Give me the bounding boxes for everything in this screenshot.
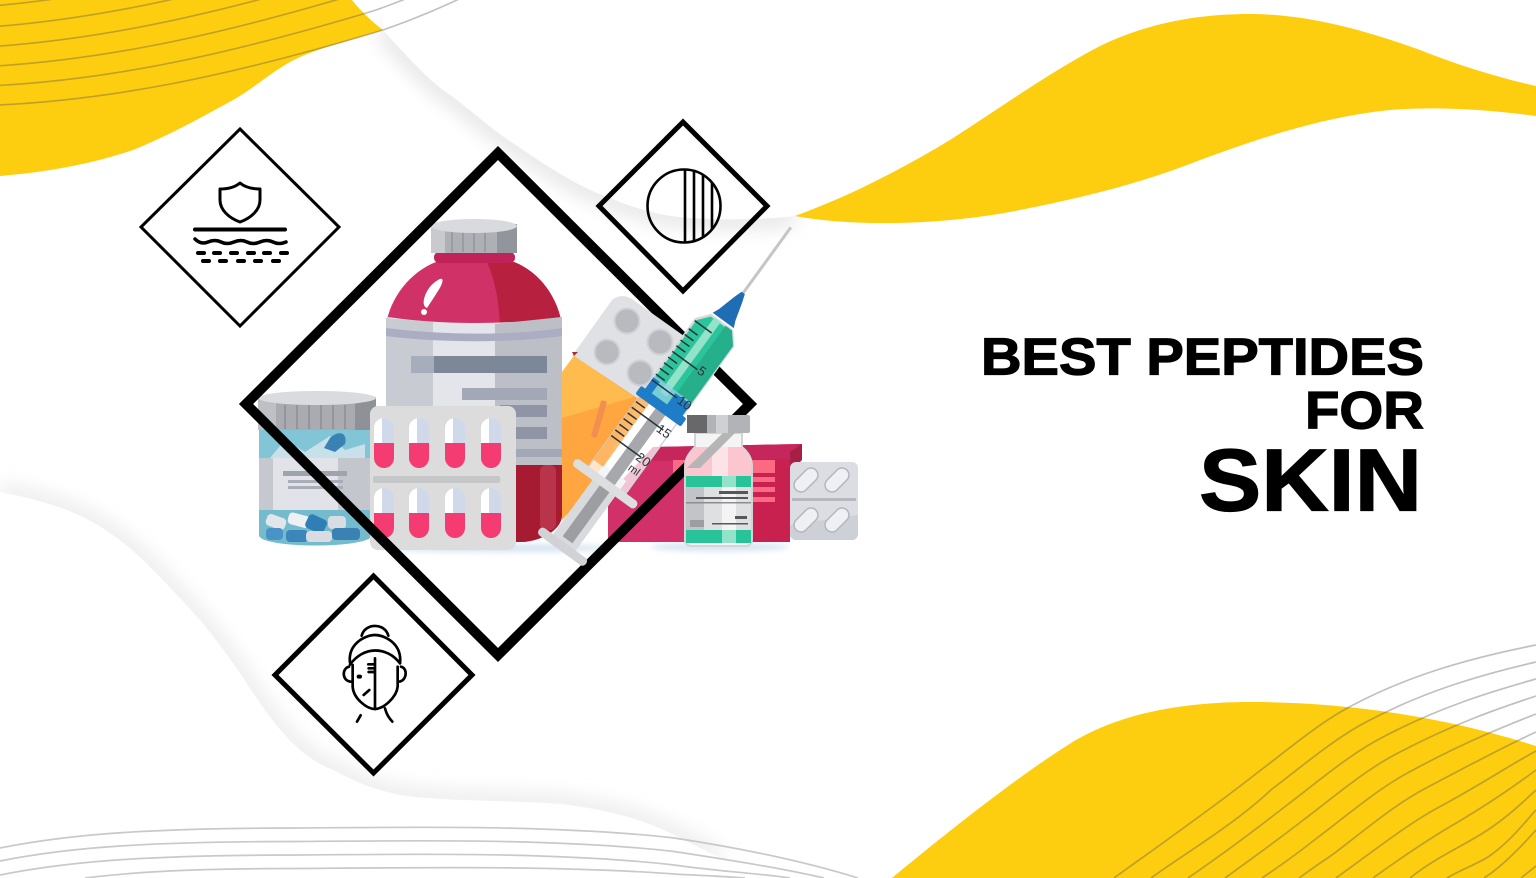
vial bbox=[685, 415, 752, 546]
scale numbers: 20 bbox=[633, 449, 654, 470]
capsule row bottom bbox=[374, 488, 501, 538]
blue needle hub bbox=[713, 285, 754, 328]
title line: skin: SKIN bbox=[1199, 430, 1422, 530]
icon: face with hat bbox=[344, 626, 406, 722]
background: soft grey wave shadows bbox=[0, 0, 900, 878]
title bbox=[981, 328, 1424, 530]
scale numbers bbox=[625, 363, 716, 480]
diamond: face care bbox=[275, 576, 472, 773]
large diamond frame bbox=[246, 153, 750, 655]
title line: for: FOR bbox=[1305, 382, 1424, 440]
ground shadow under medicines bbox=[385, 543, 790, 552]
upper barrel with fluid bbox=[643, 309, 740, 419]
icon: skin layers bbox=[195, 230, 287, 261]
needle bbox=[739, 227, 792, 298]
plunger rod bbox=[536, 393, 685, 567]
icon: striped circle bbox=[648, 170, 720, 242]
blue collar bbox=[635, 374, 695, 427]
round tablet blister bbox=[572, 296, 684, 402]
scale numbers: 5 bbox=[695, 363, 709, 379]
oblong tablet blister bbox=[790, 462, 858, 540]
contour lines: bottom left bbox=[0, 827, 858, 878]
contour lines: top left bbox=[0, 0, 470, 106]
title line: best peptides: BEST PEPTIDES bbox=[981, 328, 1424, 386]
diamond: half-shaded circle bbox=[599, 122, 767, 291]
icon: shield bbox=[220, 183, 260, 222]
pink carton box bbox=[608, 444, 802, 542]
yellow wave: top right bbox=[795, 14, 1536, 223]
frame seen through glass bbox=[687, 433, 735, 468]
medicine bottle bbox=[386, 219, 562, 542]
scale numbers: 15 bbox=[654, 421, 674, 442]
scale ticks bbox=[611, 321, 726, 458]
contour lines: bottom right bbox=[1114, 645, 1536, 878]
finger flange bbox=[571, 457, 639, 510]
yellow wave: top left bbox=[0, 0, 383, 176]
lower barrel bbox=[586, 395, 678, 497]
yellow wave: bottom right bbox=[892, 702, 1536, 878]
syringe bbox=[527, 205, 822, 571]
capsule blister pack bbox=[370, 406, 516, 550]
pill jar bbox=[258, 391, 376, 546]
capsule row top bbox=[374, 418, 501, 468]
orange carton bbox=[562, 352, 640, 520]
diamond: skin barrier bbox=[141, 129, 339, 326]
scale numbers: ml bbox=[626, 462, 642, 479]
scale numbers: 10 bbox=[674, 393, 695, 413]
